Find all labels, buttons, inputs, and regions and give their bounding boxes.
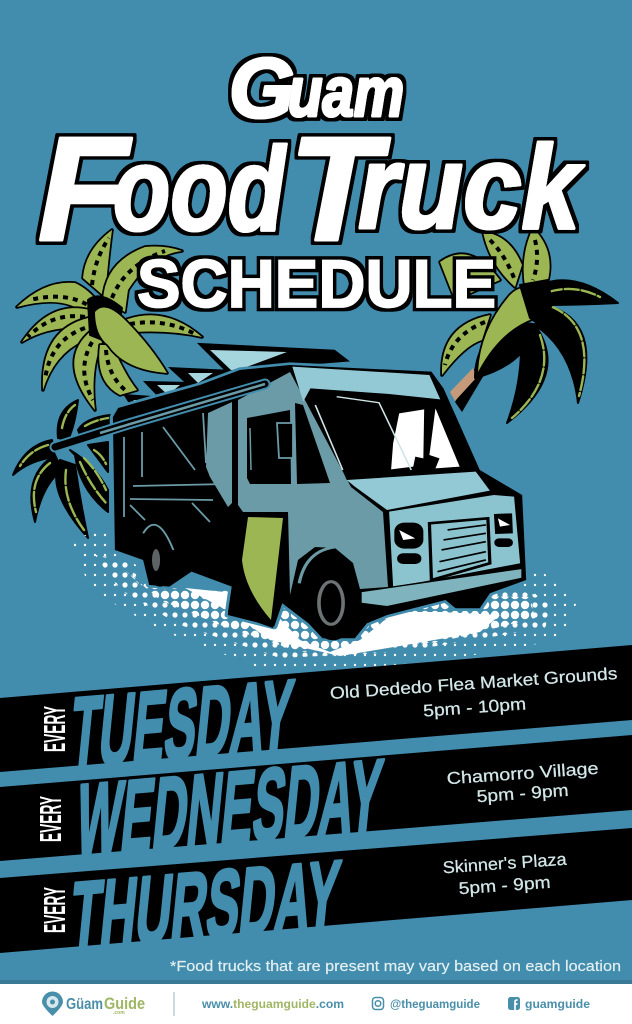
row: Tuesday: TUESDAY <box>66 659 298 790</box>
halftone white dots under truck <box>72 528 578 668</box>
side windows and mirror <box>247 403 330 484</box>
logo: the Guam Guide: Guide <box>104 994 145 1013</box>
logo: the Guam Guide <box>42 992 145 1016</box>
front wheel <box>299 547 359 640</box>
title line: Food Truck: F <box>38 107 132 272</box>
kitchen detail lines <box>124 413 227 522</box>
footer bar <box>0 980 632 1024</box>
title line: Guam: uam <box>288 53 404 131</box>
windshield <box>308 392 472 480</box>
cab roof <box>292 367 440 402</box>
roof vent flaps <box>123 342 352 413</box>
row: Wednesday <box>33 737 599 878</box>
day: Thursday: THURSDAY <box>66 840 345 971</box>
instagram handle: @theguamguide <box>390 997 480 1011</box>
time: Thursday: 5pm - 9pm <box>458 873 551 898</box>
title <box>38 41 585 322</box>
title line: Food Truck: ood <box>113 123 287 256</box>
facebook handle: guamguide <box>525 997 590 1011</box>
footnote: *Food trucks that are present may vary based on each location <box>170 958 621 975</box>
awning rod <box>55 384 265 447</box>
row: Tuesday: EVERY <box>37 706 72 752</box>
row: Thursday <box>37 840 568 971</box>
icon: instagram <box>372 998 384 1010</box>
palm tree: small left <box>13 400 110 538</box>
door with green panel <box>228 512 288 628</box>
bumper <box>361 568 522 607</box>
row: Thursday: EVERY <box>37 887 72 933</box>
title line: Food Truck <box>38 107 585 272</box>
time: Wednesday: 5pm - 9pm <box>476 781 569 806</box>
time: Tuesday: 5pm - 10pm <box>423 694 527 721</box>
icon: facebook <box>508 997 520 1010</box>
palm tree: right <box>440 228 618 423</box>
palm tree: left top <box>17 230 202 410</box>
hood <box>347 472 490 510</box>
title line: Schedule: SCHEDULE <box>137 246 496 322</box>
logo: the Guam Guide: Güam <box>66 996 103 1013</box>
logo: the Guam Guide: .com <box>113 1010 125 1016</box>
website: www.theguamguide.com <box>201 997 344 1011</box>
title line: Guam <box>229 41 404 135</box>
rear wheel <box>143 525 175 587</box>
row: Wednesday: EVERY <box>33 796 68 842</box>
food truck illustration <box>55 342 526 640</box>
truck silhouette <box>113 365 526 638</box>
title line: Guam: G <box>229 41 294 135</box>
truck front <box>389 495 520 587</box>
headlights and grille <box>394 513 513 580</box>
location: Chamorro Village: Chamorro Village <box>446 759 599 788</box>
location: Old Dededo: Old Dededo Flea Market Grounds <box>329 664 618 703</box>
curtain panel behind kitchen <box>206 402 232 507</box>
title line: Food Truck: T <box>289 107 390 272</box>
title line: Food Truck: ruck <box>358 121 585 254</box>
schedule bands <box>0 645 632 953</box>
truck side panel <box>238 372 388 595</box>
location: Skinner's Plaza: Skinner's Plaza <box>442 850 568 877</box>
